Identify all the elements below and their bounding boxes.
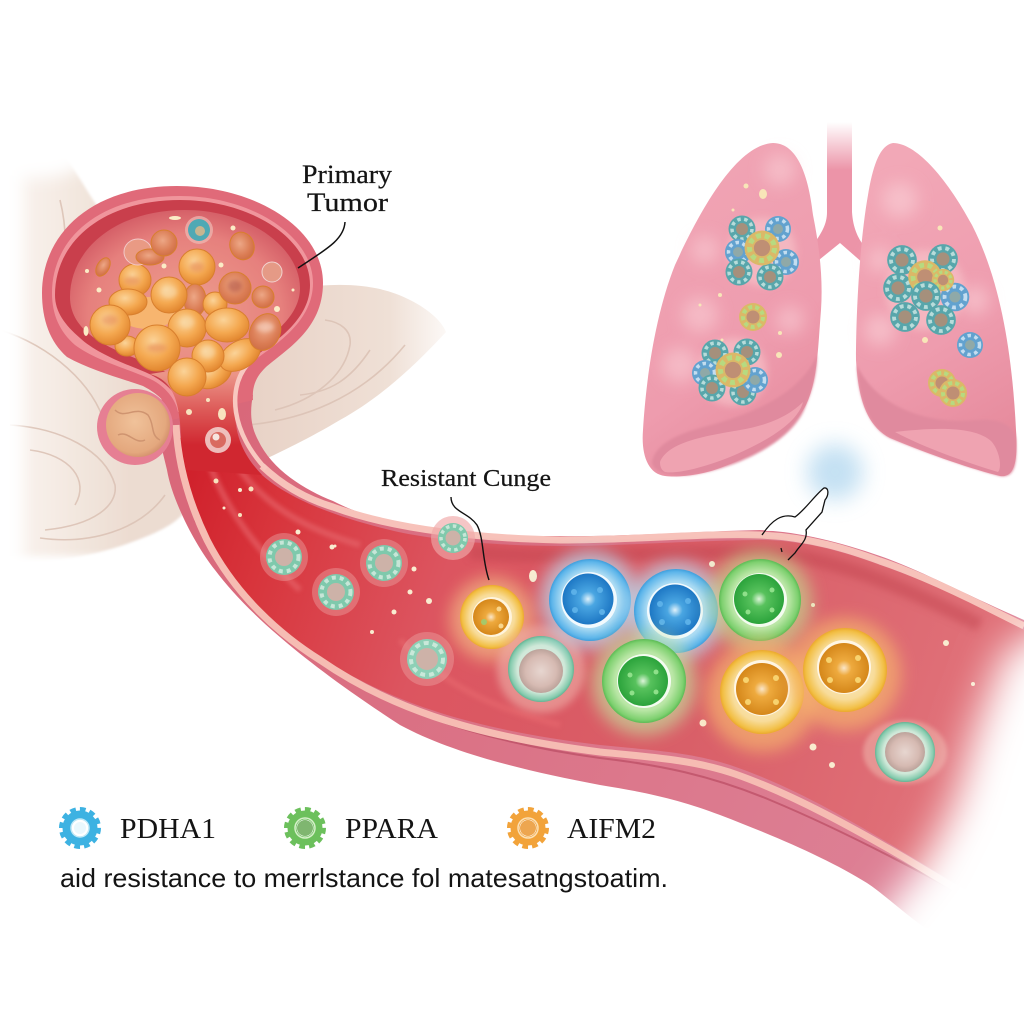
sac wall xyxy=(42,186,323,420)
drifting specks in vessel xyxy=(222,488,975,768)
vessel fade out xyxy=(860,610,1024,1024)
orange cell 1 xyxy=(706,640,818,752)
legend label: PPARA: PPARA xyxy=(345,813,438,845)
sac inner rim xyxy=(55,200,310,410)
orange cell 2 xyxy=(789,618,901,730)
right lung yellow metastasis xyxy=(928,369,967,407)
panel: surrounding tissue xyxy=(0,122,446,590)
resistant cell: small grey 1 xyxy=(260,533,308,581)
vessel lower wall dark line xyxy=(195,520,980,905)
lymph node xyxy=(97,389,173,465)
orange cell small xyxy=(450,577,534,661)
label: primary tumor: Primary xyxy=(302,160,392,189)
blue cell 2 xyxy=(626,561,726,661)
resistant cell: small grey 3 xyxy=(360,539,408,587)
teal cell in sac xyxy=(185,216,213,244)
resistant cell: crossing vessel wall xyxy=(431,516,475,560)
vessel lower inner highlight xyxy=(176,425,1000,915)
grey cell lower right xyxy=(863,720,947,784)
sac interior xyxy=(70,210,300,398)
legend icon: PPARA gear xyxy=(287,810,323,846)
right lung upper metastasis xyxy=(883,244,969,335)
trachea xyxy=(814,122,864,264)
right lung side metastasis xyxy=(957,332,983,358)
vessel lumen xyxy=(178,400,1024,925)
right lung base xyxy=(895,429,1000,472)
neck right highlight xyxy=(235,360,266,469)
green cell 1 xyxy=(708,550,812,654)
green cell 2 xyxy=(592,631,696,735)
left lung upper metastasis xyxy=(725,216,799,290)
label: primary tumor xyxy=(302,160,392,217)
right lung xyxy=(856,143,1017,476)
legend icon: PDHA1 gear xyxy=(62,810,98,846)
lumen streaks xyxy=(200,420,560,725)
panel: lungs xyxy=(643,122,1017,477)
legend label: AIFM2: AIFM2 xyxy=(567,813,656,845)
left lung xyxy=(643,143,822,477)
arrow: primary tumor pointer xyxy=(298,222,345,268)
vessel top wall highlight xyxy=(262,466,1024,626)
left lung lower metastasis xyxy=(692,338,768,406)
panel: blood vessel xyxy=(150,395,1024,930)
left lung highlights xyxy=(662,154,804,383)
sac rim highlight xyxy=(52,196,313,412)
resistant cell: small grey 2 xyxy=(312,568,360,616)
left lung middle metastasis xyxy=(739,303,767,331)
arrow: extravasation into lung xyxy=(762,488,828,560)
label: primary tumor: Tumor xyxy=(307,188,388,217)
label: resistant cells: Resistant Cunge xyxy=(381,466,551,492)
legend label: PDHA1: PDHA1 xyxy=(120,813,216,845)
right lung highlights xyxy=(864,182,989,346)
caption: aid resistance to merrlstance fol matesatngstoatim. xyxy=(60,863,668,893)
neck opening xyxy=(150,360,262,475)
blue mist above vessel xyxy=(807,444,863,500)
neck specks xyxy=(186,398,254,517)
panel: primary tumor sac xyxy=(42,186,323,517)
lung specks xyxy=(698,184,942,358)
blue cell 1 xyxy=(540,550,640,650)
lumen top shading xyxy=(470,552,980,625)
arrow: resistant cell pointer xyxy=(451,497,489,580)
tumor cell cluster xyxy=(90,229,287,396)
tumor cell centres xyxy=(102,262,274,358)
right lung lower lobe xyxy=(857,365,1016,476)
vessel outer wall xyxy=(150,395,1024,930)
grey cell medium xyxy=(497,625,585,713)
resistant cell: small grey 4 xyxy=(400,632,454,686)
left lung lower lobe xyxy=(652,355,817,475)
legend xyxy=(62,810,656,846)
legend icon: AIFM2 gear xyxy=(510,810,546,846)
floating cell in neck xyxy=(205,427,231,453)
sac specks xyxy=(84,216,294,336)
left lung base xyxy=(660,402,803,472)
